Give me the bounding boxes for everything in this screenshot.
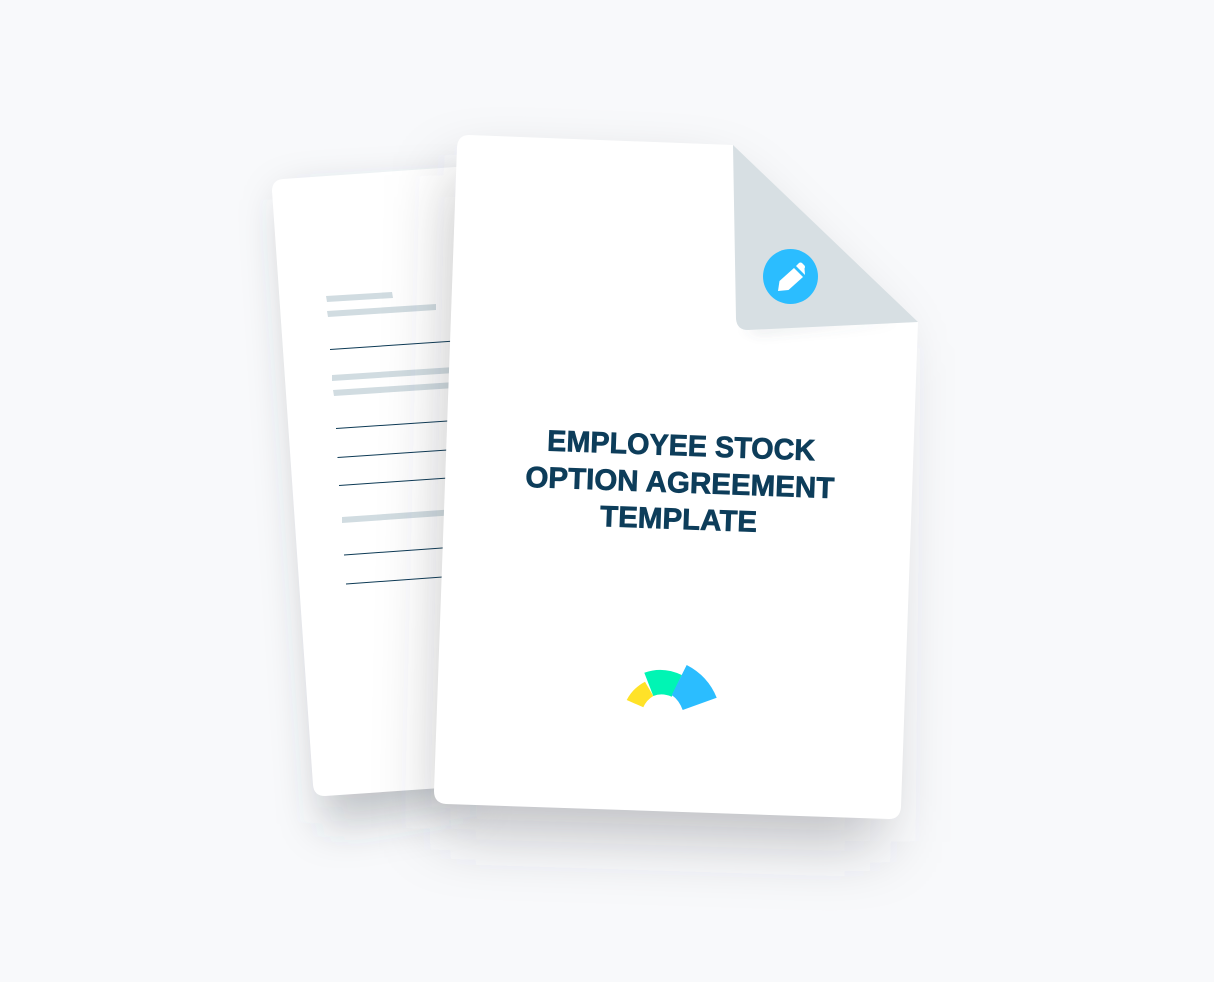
page corner fold — [733, 145, 918, 330]
icon: pencil badge — [763, 249, 818, 304]
navy rule lines — [330, 340, 450, 584]
title: OPTION AGREEMENT — [525, 461, 835, 505]
back page text lines — [326, 292, 450, 584]
title: EMPLOYEE STOCK — [547, 425, 816, 467]
grey heading bars — [326, 292, 450, 523]
illustration: two agreement documents — [262, 145, 923, 878]
logo: fan mark — [627, 665, 717, 710]
front page shadow — [440, 175, 885, 842]
back page shadow — [285, 190, 470, 825]
fold shadow — [742, 323, 900, 335]
back page sheet — [272, 166, 470, 796]
panel: front page — [434, 135, 918, 819]
title: TEMPLATE — [600, 500, 758, 539]
front page sheet — [434, 135, 918, 819]
panel: back page — [272, 166, 470, 796]
